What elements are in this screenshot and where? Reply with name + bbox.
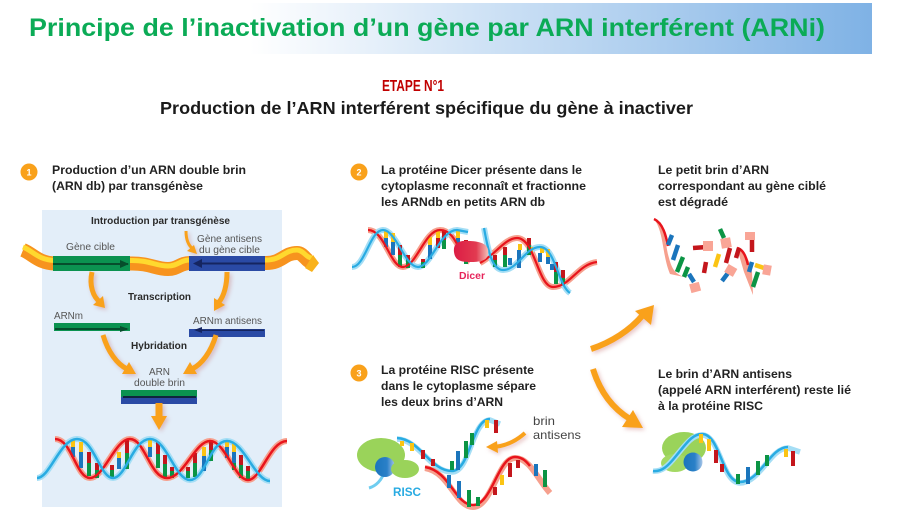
Dicer helix illustration	[352, 228, 597, 293]
RISC with antisense strand	[653, 432, 800, 484]
stage heading: Production de l’ARN interférent spécifique du gène à inactiver	[160, 98, 693, 118]
stage heading	[160, 78, 693, 118]
protein: RISC	[357, 438, 419, 488]
helix: double strand RNA	[37, 439, 287, 481]
sense strand	[425, 457, 550, 507]
label: introduction: Introduction par transgénèse	[91, 216, 230, 227]
label: Dicer: Dicer	[459, 271, 485, 282]
RISC separating strands	[357, 419, 550, 507]
antisense strand	[397, 419, 500, 472]
label: antisense mRNA: ARNm antisens	[193, 316, 262, 327]
arrow: toward degradation	[591, 305, 654, 349]
step 1 heading: 1	[26, 168, 32, 178]
label: antisense strand	[533, 414, 581, 442]
degraded strand heading: correspondant au gène ciblé	[658, 179, 826, 193]
step 1 heading: (ARN db) par transgénèse	[52, 179, 203, 193]
panel: transgenesis	[23, 210, 319, 507]
label: antisense gene: du gène cible	[199, 245, 260, 256]
label: target gene: Gène cible	[66, 242, 115, 253]
label: hybridisation: Hybridation	[131, 341, 187, 352]
gene strand	[23, 247, 319, 272]
degraded RNA fragments	[654, 219, 772, 295]
step 2 heading: cytoplasme reconnaît et fractionne	[381, 179, 586, 193]
label: RISC: RISC	[393, 487, 421, 499]
bar: double strand RNA	[121, 390, 197, 404]
arrows: transgenesis panel	[91, 231, 227, 430]
label: antisense gene: Gène antisens	[197, 234, 262, 245]
label: double strand RNA: ARN	[149, 367, 170, 378]
step 1 heading: Production d’un ARN double brin	[52, 163, 246, 177]
degraded strand heading: est dégradé	[658, 195, 728, 209]
retained strand heading	[658, 367, 851, 413]
arrow: antisense strand	[486, 433, 525, 453]
retained strand heading: (appelé ARN interférent) reste lié	[658, 383, 851, 397]
step 3 heading: dans le cytoplasme sépare	[381, 379, 536, 393]
step 2 heading: les ARNdb en petits ARN db	[381, 195, 545, 209]
label: transcription: Transcription	[128, 292, 191, 303]
step 2 heading: La protéine Dicer présente dans le	[381, 163, 582, 177]
arrow: toward RISC	[593, 369, 643, 428]
step 2 heading: 2	[356, 168, 362, 178]
label: antisense gene	[197, 234, 262, 256]
label: antisense strand: antisens	[533, 428, 581, 442]
label: double strand RNA	[134, 367, 185, 389]
step 3 heading: La protéine RISC présente	[381, 363, 534, 377]
step 3 heading: 3	[356, 368, 362, 378]
title banner: Principe de l’inactivation d’un gène par ARN interférent (ARNi)	[29, 14, 825, 42]
retained strand heading: Le brin d’ARN antisens	[658, 367, 792, 381]
bar: mRNA	[54, 323, 130, 332]
label: double strand RNA: double brin	[134, 378, 185, 389]
title banner	[29, 3, 872, 54]
step 1 heading	[20, 163, 246, 193]
protein: Dicer	[454, 241, 488, 262]
label: antisense strand: brin	[533, 414, 555, 428]
retained strand heading: à la protéine RISC	[658, 399, 763, 413]
bar: antisense mRNA	[189, 327, 265, 337]
degraded strand heading: Le petit brin d’ARN	[658, 163, 769, 177]
step 3 heading: les deux brins d’ARN	[381, 395, 503, 409]
stage heading: ETAPE N°1	[382, 78, 444, 95]
label: mRNA: ARNm	[54, 311, 83, 322]
degraded strand heading	[658, 163, 826, 209]
step 2 heading	[350, 163, 586, 209]
step 3 heading	[350, 363, 536, 409]
